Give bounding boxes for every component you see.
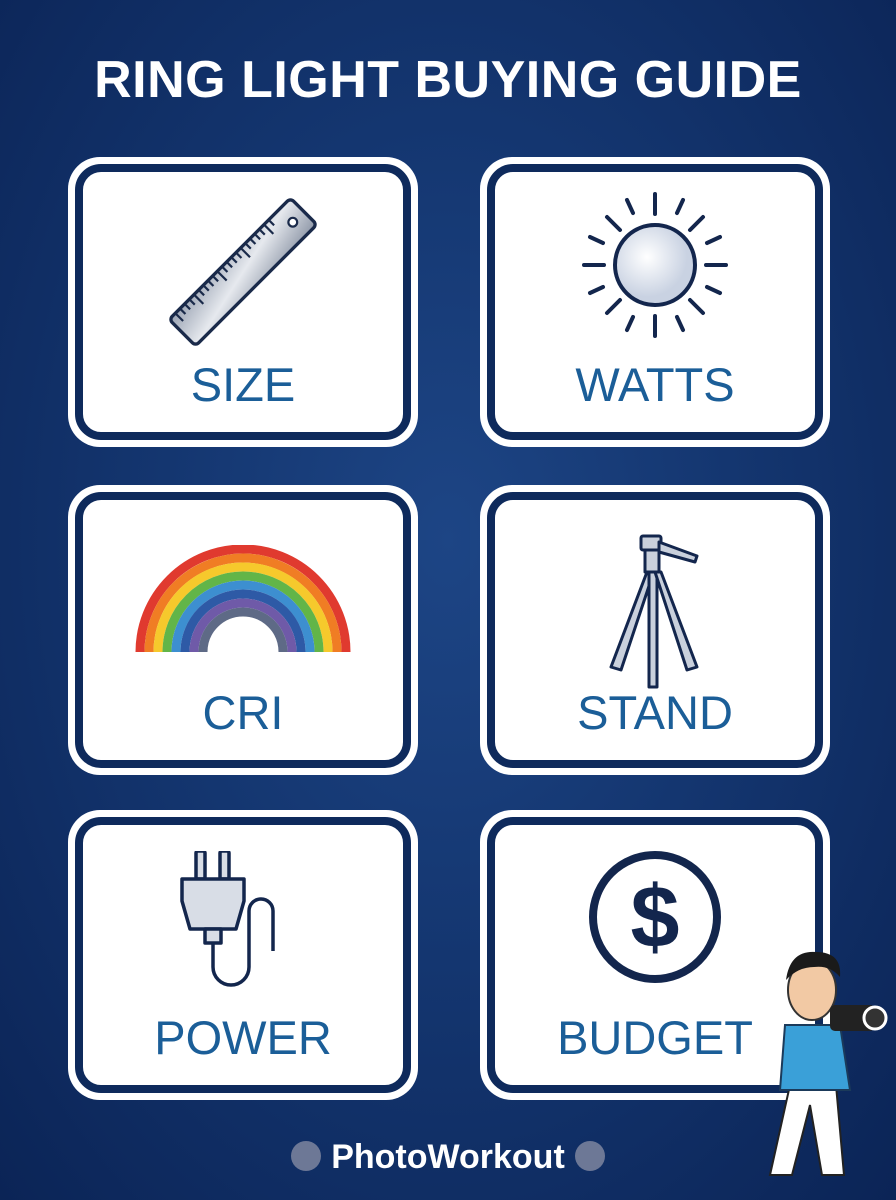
icon: plug [180, 851, 275, 987]
panel: size [68, 157, 418, 447]
panel: power [68, 810, 418, 1100]
title: RING LIGHT BUYING GUIDE [94, 51, 802, 109]
label: BUDGET [557, 1011, 753, 1064]
label: POWER [154, 1011, 332, 1064]
icon: dollar coin [589, 851, 721, 983]
panel: cri [68, 485, 418, 775]
icon: aperture left [291, 1141, 321, 1171]
label: WATTS [575, 358, 735, 411]
label: CRI [203, 686, 283, 739]
panel: budget [480, 810, 830, 1100]
label: SIZE [191, 358, 295, 411]
icon: tripod [610, 534, 698, 688]
label: STAND [577, 686, 733, 739]
footer: brand: PhotoWorkout [331, 1138, 565, 1176]
icon: dollar coin: $ [631, 867, 679, 966]
icon: sun [582, 192, 728, 338]
icon: rainbow [136, 545, 350, 652]
icon: ruler [169, 198, 317, 346]
panel: stand [480, 485, 830, 775]
character: photographer mascot [768, 952, 888, 1176]
panel: watts [480, 157, 830, 447]
